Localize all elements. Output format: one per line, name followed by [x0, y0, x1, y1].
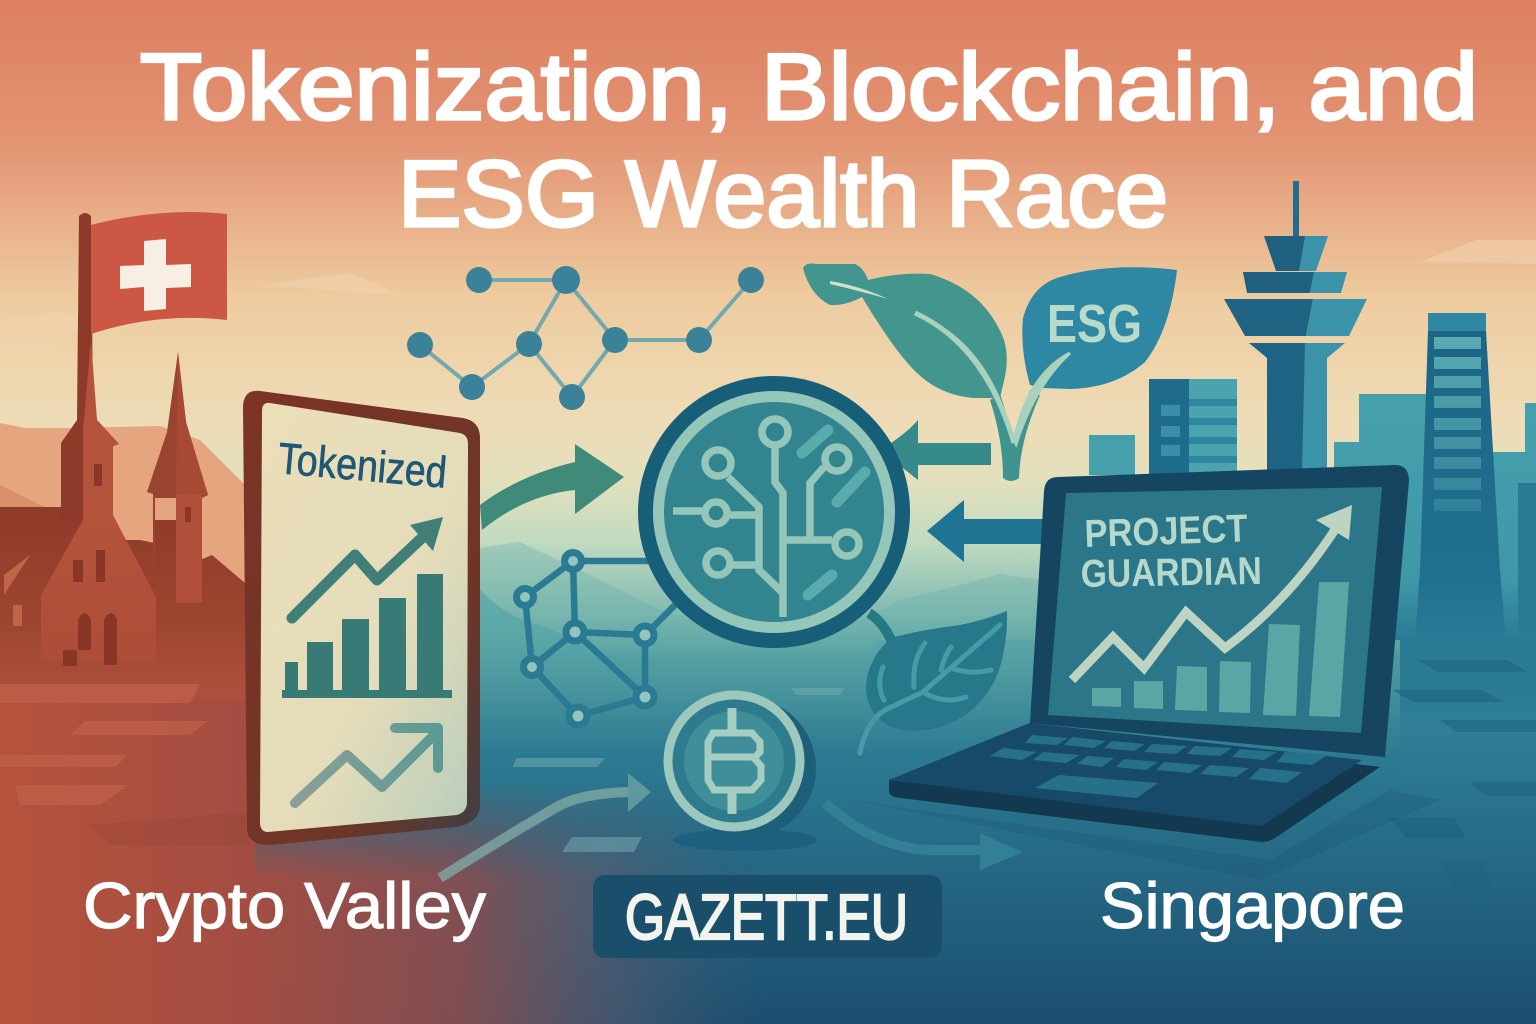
- faint arrow right of coin: [825, 803, 1023, 870]
- network graph top: [407, 266, 764, 410]
- tablet lower trend: [295, 728, 438, 803]
- ground stripes: [0, 684, 208, 805]
- right ground behind skyline: [1400, 560, 1536, 780]
- badge: GAZETT.EU: GAZETT.EU: [625, 881, 908, 953]
- green arrow to hub: [480, 444, 624, 530]
- label: Crypto Valley: Crypto Valley: [83, 869, 487, 942]
- stem: [990, 390, 1040, 481]
- striped building: [1149, 379, 1189, 474]
- ESG leaf: [1022, 267, 1177, 389]
- Singapore skyline: [1089, 181, 1536, 640]
- tablet line arrow: [292, 535, 425, 618]
- observation tower: [1224, 181, 1367, 470]
- village windows: [63, 464, 191, 666]
- laptop: [889, 465, 1409, 842]
- laptop bars: [1092, 582, 1349, 717]
- title: Tokenization, Blockchain, and: [140, 34, 1478, 139]
- ESG plant: [803, 264, 1177, 481]
- far teal blocks: [1334, 394, 1536, 640]
- label: Singapore: Singapore: [1100, 869, 1405, 942]
- left peach hills: [0, 423, 250, 620]
- laptop heading: GUARDIAN: [1080, 550, 1262, 596]
- swiss village silhouette: [0, 213, 245, 700]
- tablet: Tokenized: [243, 391, 480, 845]
- center mountains: [480, 542, 1040, 760]
- veins: [830, 281, 888, 299]
- title: ESG Wealth Race: [398, 141, 1168, 246]
- faint arrow to coin: [440, 773, 651, 878]
- left window: [13, 605, 22, 626]
- laptop trend line: [1072, 525, 1338, 680]
- left-pointing teal arrow: [880, 420, 991, 480]
- tablet ground shadow: [90, 812, 250, 845]
- hub traces: [673, 419, 859, 617]
- big leaf: [803, 264, 1007, 398]
- flag: [91, 212, 227, 334]
- laptop base: [889, 723, 1380, 842]
- title: [140, 34, 1478, 246]
- flag cross: [120, 239, 191, 311]
- laptop heading: [1080, 507, 1262, 596]
- laptop lid: [1030, 465, 1409, 757]
- hub highlights: [802, 430, 865, 595]
- tall tower: [1415, 331, 1506, 640]
- right tower: [132, 352, 208, 603]
- central circuit hub: [646, 384, 902, 640]
- tablet heading: Tokenized: [276, 434, 449, 498]
- dark leaf lower: [860, 611, 1007, 753]
- skylight: [4, 555, 30, 595]
- lower network: [516, 552, 675, 725]
- main tower front: [41, 340, 156, 662]
- laptop keyboard: [990, 735, 1328, 798]
- main tower rear: [61, 213, 119, 520]
- arrow from laptop: [927, 500, 1050, 562]
- laptop ground shadow: [850, 790, 1440, 880]
- bitcoin coin: [668, 695, 817, 851]
- laptop heading: PROJECT: [1084, 507, 1248, 556]
- small building: [1089, 435, 1135, 475]
- floating dashes on ground: [513, 660, 1536, 900]
- ESG label: ESG: [1047, 294, 1142, 354]
- tablet bars: [282, 574, 452, 698]
- rear roof mass: [0, 507, 245, 700]
